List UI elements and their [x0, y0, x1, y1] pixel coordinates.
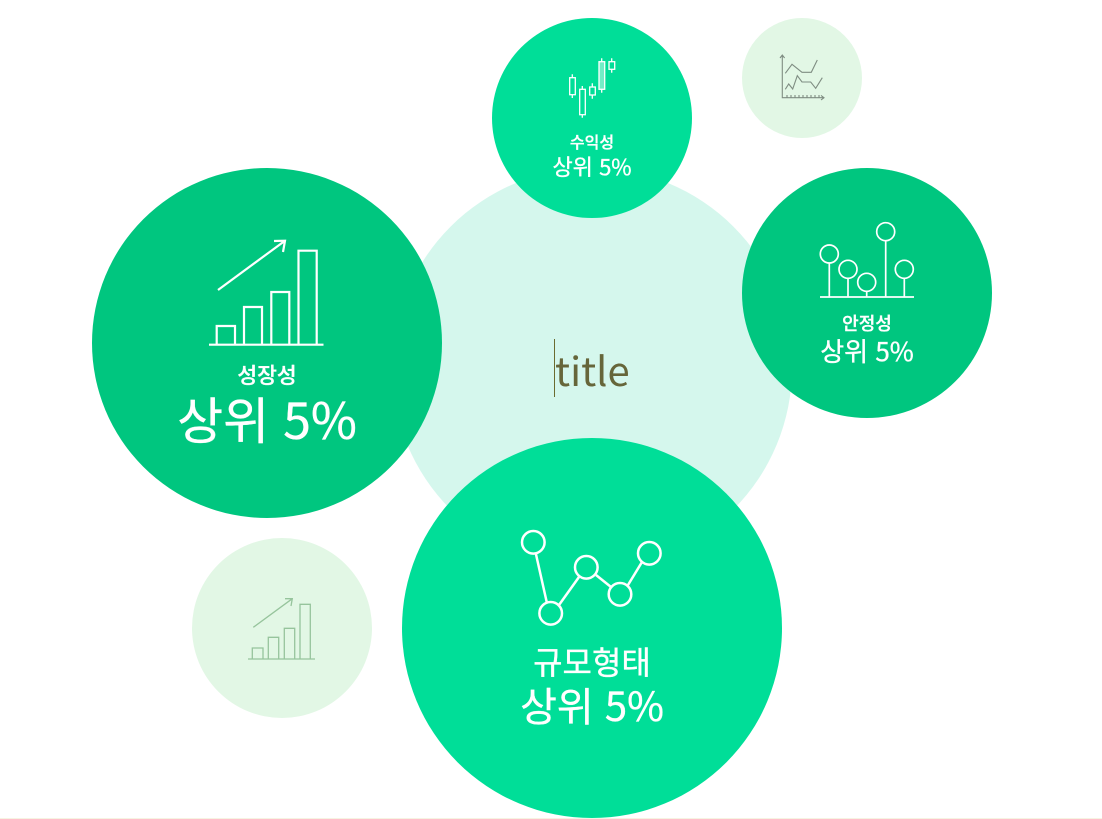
icon: lollipop chart	[820, 223, 914, 297]
value: size: 상위 5%	[520, 675, 664, 733]
icon: bar chart with arrow	[209, 241, 324, 345]
center circle with title: title	[555, 340, 630, 398]
value: growth: 상위 5%	[177, 382, 357, 454]
label: stability: 안정성	[842, 310, 892, 336]
center circle with title	[392, 168, 792, 568]
icon: small bar chart with arrow	[248, 599, 315, 659]
label: growth: 성장성	[237, 359, 297, 390]
bubble: decorative line chart	[742, 18, 862, 138]
icon: line chart	[780, 55, 824, 100]
icon: connected dot chart	[522, 531, 661, 625]
bubble: decorative bar chart	[192, 538, 372, 718]
bubble: stability	[742, 168, 992, 418]
bubble: profitability	[492, 18, 692, 218]
label: size: 규모형태	[533, 638, 651, 684]
bubble: size	[402, 438, 782, 818]
label: profitability: 수익성	[570, 129, 614, 153]
value: profitability: 상위 5%	[552, 150, 632, 182]
bubble: growth	[92, 168, 442, 518]
value: stability: 상위 5%	[820, 332, 914, 369]
icon: candlestick chart	[570, 58, 615, 118]
